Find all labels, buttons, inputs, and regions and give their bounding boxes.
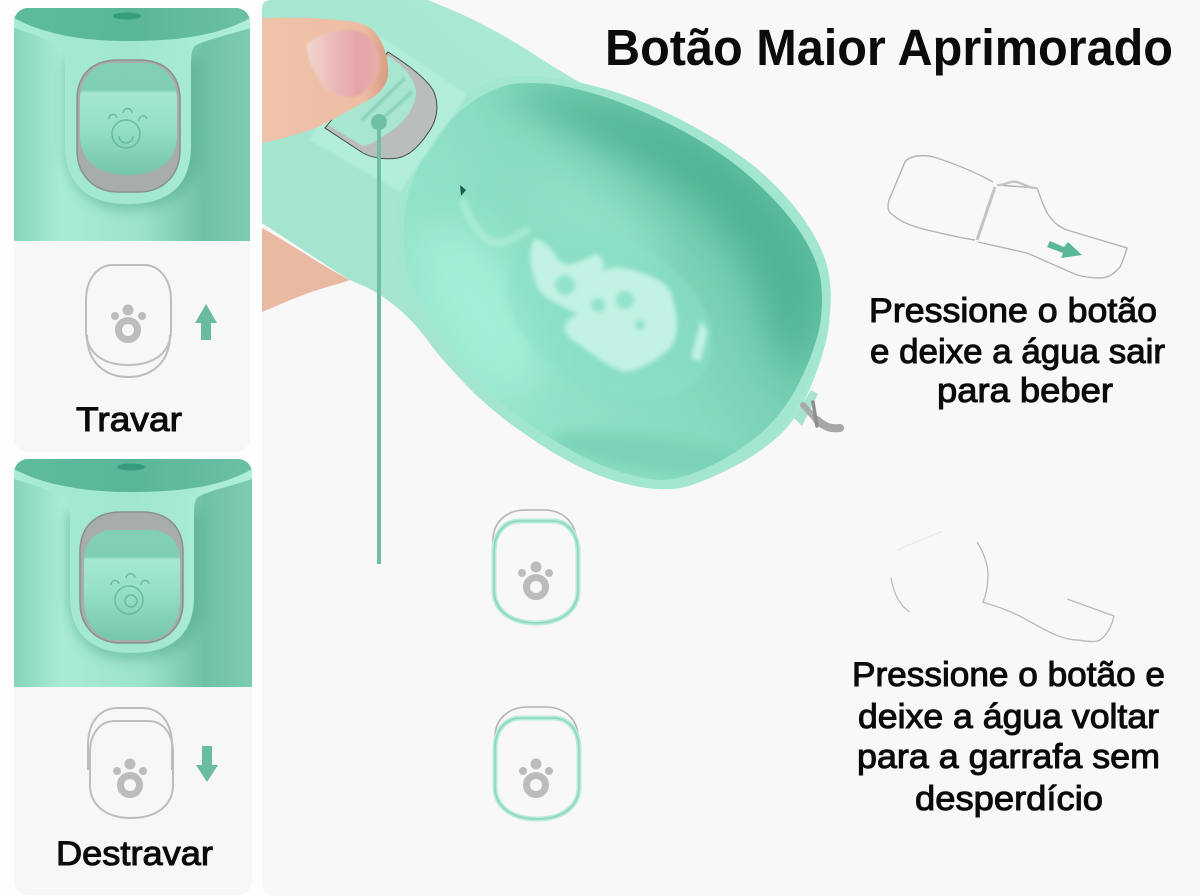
text block: return instruction: Pressione o botão e <box>852 656 1165 694</box>
grey button housing <box>325 52 437 159</box>
bottle close-up: locked button <box>14 8 250 241</box>
icon: button released, green <box>495 707 579 819</box>
title: Botão Maior Aprimorado <box>605 19 1173 76</box>
icon: grey paw <box>111 304 146 340</box>
lanyard <box>794 390 840 428</box>
text block: return instruction: para a garrafa sem <box>857 738 1160 776</box>
arrow: down <box>196 746 218 782</box>
text block: return instruction <box>852 656 1165 818</box>
text block: return instruction: deixe a água voltar <box>858 698 1159 736</box>
water highlight gaps <box>555 275 645 330</box>
text block: return instruction: desperdício <box>915 780 1103 818</box>
water surface ring <box>510 280 704 343</box>
icon: button pressed, green <box>493 510 578 623</box>
button pad <box>310 28 467 192</box>
lower finger <box>262 228 350 312</box>
main panel background <box>262 0 1200 896</box>
icon: embossed paw <box>109 108 147 148</box>
text block: drink instruction: para beber <box>937 372 1113 410</box>
bottle photo with hand <box>262 0 840 490</box>
text block: drink instruction: Pressione o botão <box>869 292 1157 330</box>
arrow: flow direction <box>1047 241 1082 258</box>
bottle body <box>262 0 830 489</box>
icon: grey paw <box>113 758 147 794</box>
button ridges <box>362 78 412 128</box>
panel: lock state <box>14 8 250 452</box>
arrow: up <box>195 304 217 340</box>
icon: unlocked button diagram <box>88 708 173 818</box>
sketch: bottle with water returning <box>891 531 1114 642</box>
text block: drink instruction: e deixe a água sair <box>870 333 1165 371</box>
bowl interior <box>394 75 830 490</box>
bowl rim <box>394 76 831 489</box>
label: Destravar: Destravar <box>56 835 213 873</box>
panel: unlock state <box>14 459 252 895</box>
icon: grey paw <box>519 758 553 794</box>
water highlight <box>530 240 708 372</box>
icon: embossed paw <box>111 574 149 614</box>
water spout <box>462 200 530 243</box>
green button <box>328 56 416 146</box>
thumb <box>262 18 388 143</box>
bottle close-up: unlocked button <box>14 459 252 687</box>
sketch: bottle with water flowing out <box>888 156 1127 278</box>
text block: drink instruction <box>869 292 1165 410</box>
icon: grey paw <box>518 562 553 596</box>
thumbnail <box>306 30 379 97</box>
icon: locked button diagram <box>86 265 171 377</box>
callout line with pin <box>371 114 387 564</box>
label: Travar: Travar <box>76 401 182 439</box>
